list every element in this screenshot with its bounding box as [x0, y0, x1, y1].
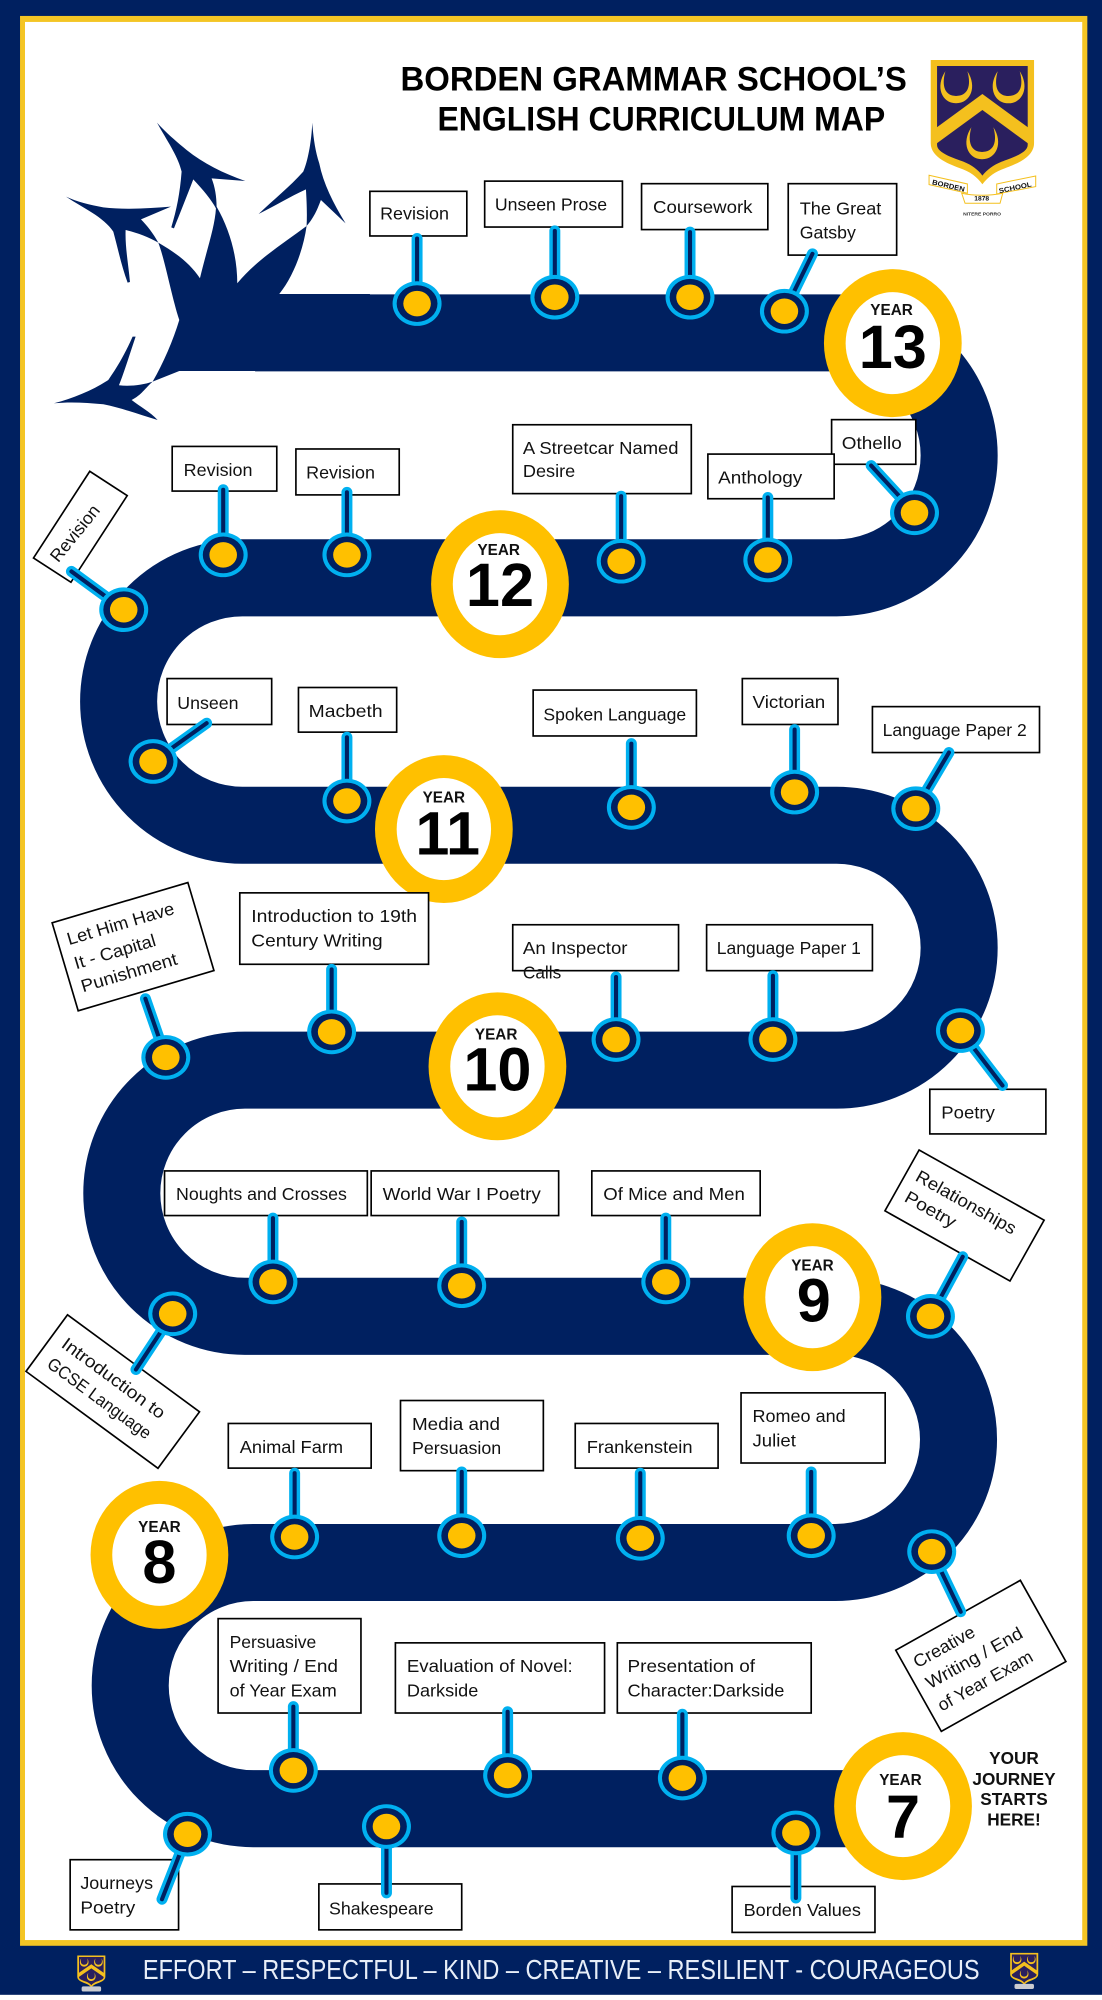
label: Introduction to GCSE Language: Introduction to — [58, 1333, 170, 1423]
label: Poetry — [930, 1008, 1046, 1134]
icon: footer crest left — [77, 1955, 105, 1992]
label: Revision (Year 13): Revision — [380, 203, 449, 223]
road: curriculum path — [119, 333, 959, 1809]
icon: school crest — [929, 60, 1036, 217]
label: Creative Writing / End of Year Exam: of Year Exam — [934, 1646, 1036, 1715]
label: Presentation of Character:Darkside — [617, 1643, 811, 1800]
year 8 marker: YEAR — [138, 1519, 181, 1536]
callout: your journey starts here: STARTS — [980, 1789, 1048, 1809]
label: Of Mice and Men — [592, 1171, 760, 1304]
label: Persuasive Writing / End of Year Exam: Writing / End — [230, 1656, 338, 1676]
label: Romeo and Juliet — [741, 1393, 885, 1558]
icon: school crest: NITERE PORRO — [963, 211, 1001, 217]
label: World War I Poetry — [371, 1171, 559, 1308]
year 13 marker — [824, 269, 962, 417]
year 7 marker: 7 — [886, 1783, 920, 1851]
label: Borden Values: Borden Values — [744, 1900, 861, 1920]
label: Revision (Year 12, left) — [172, 446, 277, 577]
label: Language Paper 1: Language Paper 1 — [717, 938, 861, 958]
label: Revision (rotated): Revision — [46, 501, 104, 566]
label: Poetry: Poetry — [941, 1103, 995, 1123]
year 12 marker — [431, 510, 569, 658]
year 8 marker: 8 — [142, 1528, 176, 1596]
label: Creative Writing / End of Year Exam — [896, 1529, 1066, 1731]
icon: school crest: SCHOOL — [998, 181, 1033, 195]
year 7 marker: YEAR — [879, 1772, 922, 1789]
year 11 marker: YEAR — [423, 789, 465, 806]
label: Presentation of Character:Darkside: Character:Darkside — [628, 1680, 784, 1700]
label: Language Paper 2 — [872, 707, 1040, 831]
year 10 marker: 10 — [463, 1036, 531, 1104]
label: Anthology — [708, 454, 834, 582]
icon: school crest: 1878 — [974, 196, 989, 203]
label: Frankenstein — [575, 1423, 718, 1561]
label: Revision (Year 12, right): Revision — [306, 462, 375, 482]
label: A Streetcar Named Desire: Desire — [523, 461, 575, 481]
label: An Inspector Calls — [513, 925, 679, 1062]
label: Coursework — [642, 184, 768, 320]
label: Noughts and Crosses — [165, 1171, 367, 1304]
year 12 marker: 12 — [466, 551, 534, 619]
label: Macbeth — [298, 688, 397, 823]
label: Relationships Poetry — [885, 1150, 1044, 1339]
year 10 marker: YEAR — [475, 1027, 517, 1044]
label: Unseen: Unseen — [177, 693, 239, 713]
callout: your journey starts here: HERE! — [987, 1809, 1041, 1829]
year 13 marker: 13 — [859, 313, 927, 381]
label: Persuasive Writing / End of Year Exam: of Year Exam — [230, 1680, 337, 1700]
label: Introduction to GCSE Language: GCSE Language — [43, 1353, 155, 1443]
year 9 marker — [744, 1223, 881, 1371]
year 10 marker — [429, 992, 566, 1140]
label: The Great Gatsby: The Great — [800, 198, 881, 218]
year 12 marker: YEAR — [477, 542, 520, 559]
label: Revision (rotated) — [34, 471, 148, 632]
icon: school crest: BORDEN — [931, 179, 965, 194]
label: Unseen Prose — [485, 181, 622, 320]
label: Evaluation of Novel: Darkside: Darkside — [407, 1680, 478, 1700]
footer values: EFFORT – RESPECTFUL – KIND – CREATIVE – RESILIENT - COURAGEOUS — [143, 1954, 980, 1985]
title: BORDEN GRAMMAR SCHOOL’S — [400, 61, 907, 99]
label: Evaluation of Novel: Darkside — [395, 1643, 605, 1798]
label: Journeys Poetry — [70, 1812, 212, 1930]
year 13 marker: YEAR — [870, 302, 913, 319]
label: Anthology: Anthology — [718, 467, 802, 487]
year 11 marker — [375, 755, 513, 903]
label: Spoken Language — [533, 690, 696, 830]
callout: your journey starts here: YOUR — [989, 1748, 1039, 1768]
label: An Inspector Calls: An Inspector — [523, 938, 628, 958]
label: Language Paper 1 — [707, 925, 872, 1062]
label: Borden Values — [732, 1811, 875, 1932]
label: Relationships Poetry: Relationships — [912, 1166, 1020, 1239]
label: Creative Writing / End of Year Exam: Writing / End — [922, 1623, 1026, 1693]
icon: footer crest right — [1010, 1953, 1038, 1989]
label: A Streetcar Named Desire — [513, 425, 691, 584]
label: Let Him Have It - Capital Punishment: Punishment — [78, 949, 180, 996]
label: Persuasive Writing / End of Year Exam: Persuasive — [230, 1632, 316, 1652]
label: Evaluation of Novel: Darkside: Evaluation of Novel: — [407, 1656, 573, 1676]
callout: your journey starts here: JOURNEY — [972, 1769, 1056, 1789]
label: Journeys Poetry: Journeys — [80, 1873, 153, 1893]
label: Persuasive Writing / End of Year Exam — [218, 1619, 361, 1793]
label: Revision (Year 12, right) — [296, 449, 399, 577]
label: Othello — [832, 420, 939, 535]
year 7 marker — [834, 1732, 972, 1880]
label: Media and Persuasion — [400, 1401, 543, 1558]
label: Let Him Have It - Capital Punishment — [52, 883, 214, 1080]
title: ENGLISH CURRICULUM MAP — [437, 101, 885, 139]
label: Let Him Have It - Capital Punishment: Let Him Have — [64, 898, 177, 949]
label: Spoken Language: Spoken Language — [543, 705, 686, 725]
label: World War I Poetry: World War I Poetry — [383, 1184, 541, 1204]
label: Media and Persuasion: Media and — [412, 1414, 500, 1434]
label: Othello: Othello — [842, 433, 902, 453]
label: Animal Farm — [228, 1423, 371, 1559]
label: Creative Writing / End of Year Exam: Creative — [910, 1622, 978, 1672]
label: Coursework: Coursework — [653, 197, 753, 217]
label: Let Him Have It - Capital Punishment: It - Capital — [72, 930, 158, 973]
label: The Great Gatsby: Gatsby — [800, 223, 856, 243]
label: Noughts and Crosses: Noughts and Crosses — [176, 1184, 347, 1204]
label: Revision (Year 12, left): Revision — [184, 460, 253, 480]
label: Language Paper 2: Language Paper 2 — [883, 720, 1027, 740]
label: Introduction to 19th Century Writing: Introduction to 19th — [251, 906, 417, 926]
label: Of Mice and Men: Of Mice and Men — [603, 1184, 745, 1204]
label: Romeo and Juliet: Romeo and — [753, 1406, 846, 1426]
label: Unseen — [129, 679, 272, 784]
label: Romeo and Juliet: Juliet — [753, 1430, 796, 1450]
label: Macbeth: Macbeth — [309, 701, 383, 721]
label: Presentation of Character:Darkside: Presentation of — [628, 1656, 755, 1676]
label: Revision (Year 13) — [370, 191, 467, 326]
label: Victorian — [742, 679, 838, 814]
label: Media and Persuasion: Persuasion — [412, 1438, 501, 1458]
label: Shakespeare: Shakespeare — [329, 1899, 434, 1919]
callout: your journey starts here — [972, 1748, 1056, 1829]
label: Journeys Poetry: Poetry — [80, 1897, 135, 1917]
year 9 marker: YEAR — [791, 1257, 834, 1274]
label: Introduction to 19th Century Writing: Century Writing — [251, 930, 383, 950]
year 11 marker: 11 — [415, 800, 480, 868]
year 8 marker — [91, 1481, 228, 1629]
label: Unseen Prose: Unseen Prose — [495, 194, 607, 214]
label: Shakespeare — [319, 1804, 462, 1930]
year 9 marker: 9 — [797, 1266, 831, 1334]
title — [400, 61, 907, 139]
label: Frankenstein: Frankenstein — [587, 1437, 693, 1457]
label: Animal Farm: Animal Farm — [240, 1437, 343, 1457]
label: Relationships Poetry: Poetry — [901, 1187, 960, 1232]
label: The Great Gatsby — [760, 184, 897, 334]
label: Introduction to GCSE Language — [26, 1291, 200, 1468]
tree: branching road end — [54, 123, 370, 420]
label: An Inspector Calls: Calls — [523, 962, 561, 982]
label: Introduction to 19th Century Writing — [240, 893, 429, 1054]
label: Victorian: Victorian — [753, 692, 825, 712]
label: A Streetcar Named Desire: A Streetcar Named — [523, 438, 679, 458]
